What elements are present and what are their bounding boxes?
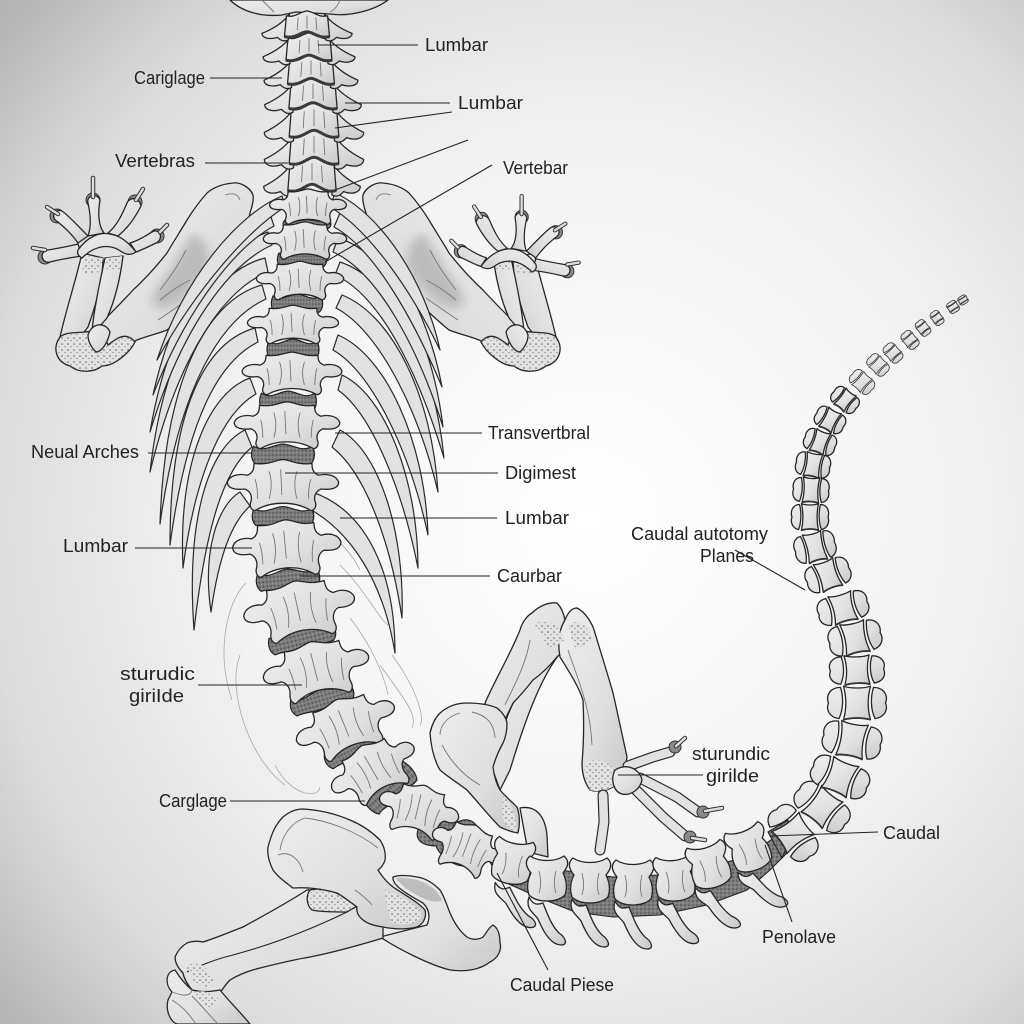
- label: Cariglage top: Cariglage: [134, 68, 205, 88]
- label: Transvertbral: Transvertbral: [488, 423, 590, 443]
- label: Caudal: Caudal: [883, 823, 940, 843]
- label: Caurbar: Caurbar: [497, 566, 562, 586]
- hind leg bones and foot: [485, 603, 722, 850]
- label: Lumbar second: Lumbar: [458, 93, 523, 113]
- label: sturundic girilde right: [618, 744, 770, 786]
- label: Caudal Piese: [497, 873, 614, 995]
- label: Lumbar left: Lumbar: [63, 536, 128, 556]
- label: Caudal autotomy Planes: [631, 524, 805, 590]
- label: Caudal autotomy Planes: Planes: [700, 546, 754, 566]
- thoracic and lumbar spine: [227, 189, 428, 817]
- right hand: [451, 196, 579, 278]
- left ribs: [150, 196, 285, 630]
- label: Lumbar second: [335, 93, 523, 128]
- label: Vertebar: Vertebar: [503, 158, 568, 178]
- left limb: [56, 183, 253, 371]
- label: Digimest: Digimest: [505, 463, 576, 483]
- tail: lower horizontal section: [373, 775, 790, 949]
- label: Penolave: [762, 845, 836, 947]
- label: sturudic giriIde left: [120, 664, 302, 706]
- label: Caudal autotomy Planes: Caudal autotomy: [631, 524, 768, 544]
- label: sturudic giriIde left: giriIde: [129, 686, 184, 706]
- left hand: [33, 178, 167, 264]
- label: Penolave: Penolave: [762, 927, 836, 947]
- label: Vertebras: Vertebras: [115, 151, 195, 171]
- label: Caudal Piese: Caudal Piese: [510, 975, 614, 995]
- skull base at top: [230, 0, 388, 15]
- right limb: [363, 183, 560, 371]
- label: Carglage lower: Carglage: [159, 791, 227, 811]
- label: Neual Arches: Neual Arches: [31, 442, 139, 462]
- label: sturudic giriIde left: sturudic: [120, 664, 195, 684]
- cervical vertebrae: [262, 11, 364, 196]
- label: Caudal: [770, 823, 940, 843]
- label: Vertebar: [325, 140, 568, 262]
- tail: rising section: [762, 294, 969, 867]
- label: sturundic girilde right: girilde: [706, 766, 759, 786]
- upper pelvis: [430, 703, 548, 857]
- label: Lumbar middle right: Lumbar: [505, 508, 569, 528]
- label: Lumbar top: Lumbar: [425, 35, 488, 55]
- right ribs: [306, 193, 444, 653]
- lower left pelvis, femur and foot: [167, 809, 501, 1024]
- label: sturundic girilde right: sturundic: [692, 744, 770, 764]
- motion lines near lower spine: [224, 535, 422, 794]
